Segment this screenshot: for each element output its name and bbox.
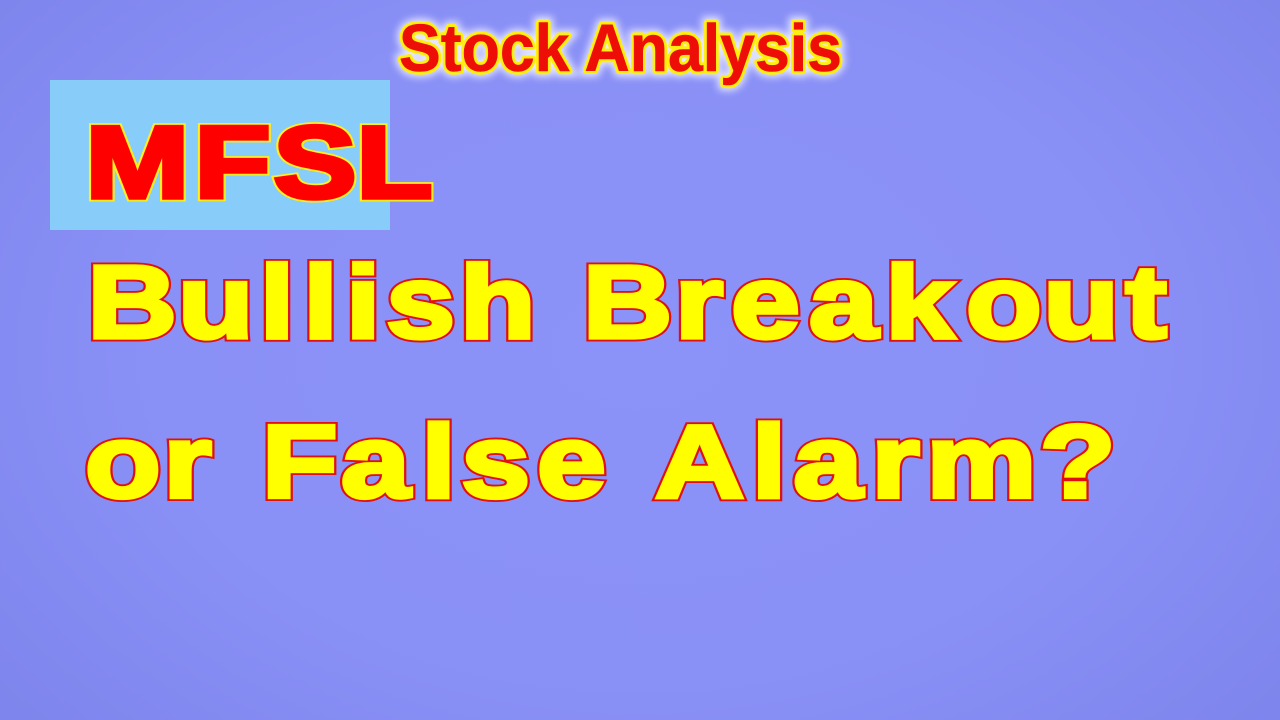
ticker: MFSL: MFSL xyxy=(86,106,432,220)
headline: or False Alarm?: or False Alarm? xyxy=(85,405,1116,520)
light blue ticker box xyxy=(50,80,390,230)
headline: Bullish Breakout: Bullish Breakout xyxy=(87,245,1167,360)
headline: or False Alarm?: or False Alarm? xyxy=(85,405,1116,520)
title: Stock Analysis: Stock Analysis xyxy=(399,11,842,86)
title: Stock Analysis: Stock Analysis xyxy=(399,11,842,86)
headline: Bullish Breakout: Bullish Breakout xyxy=(87,245,1167,360)
title: Stock Analysis: Stock Analysis xyxy=(399,11,842,86)
ticker: MFSL: MFSL xyxy=(86,106,432,220)
